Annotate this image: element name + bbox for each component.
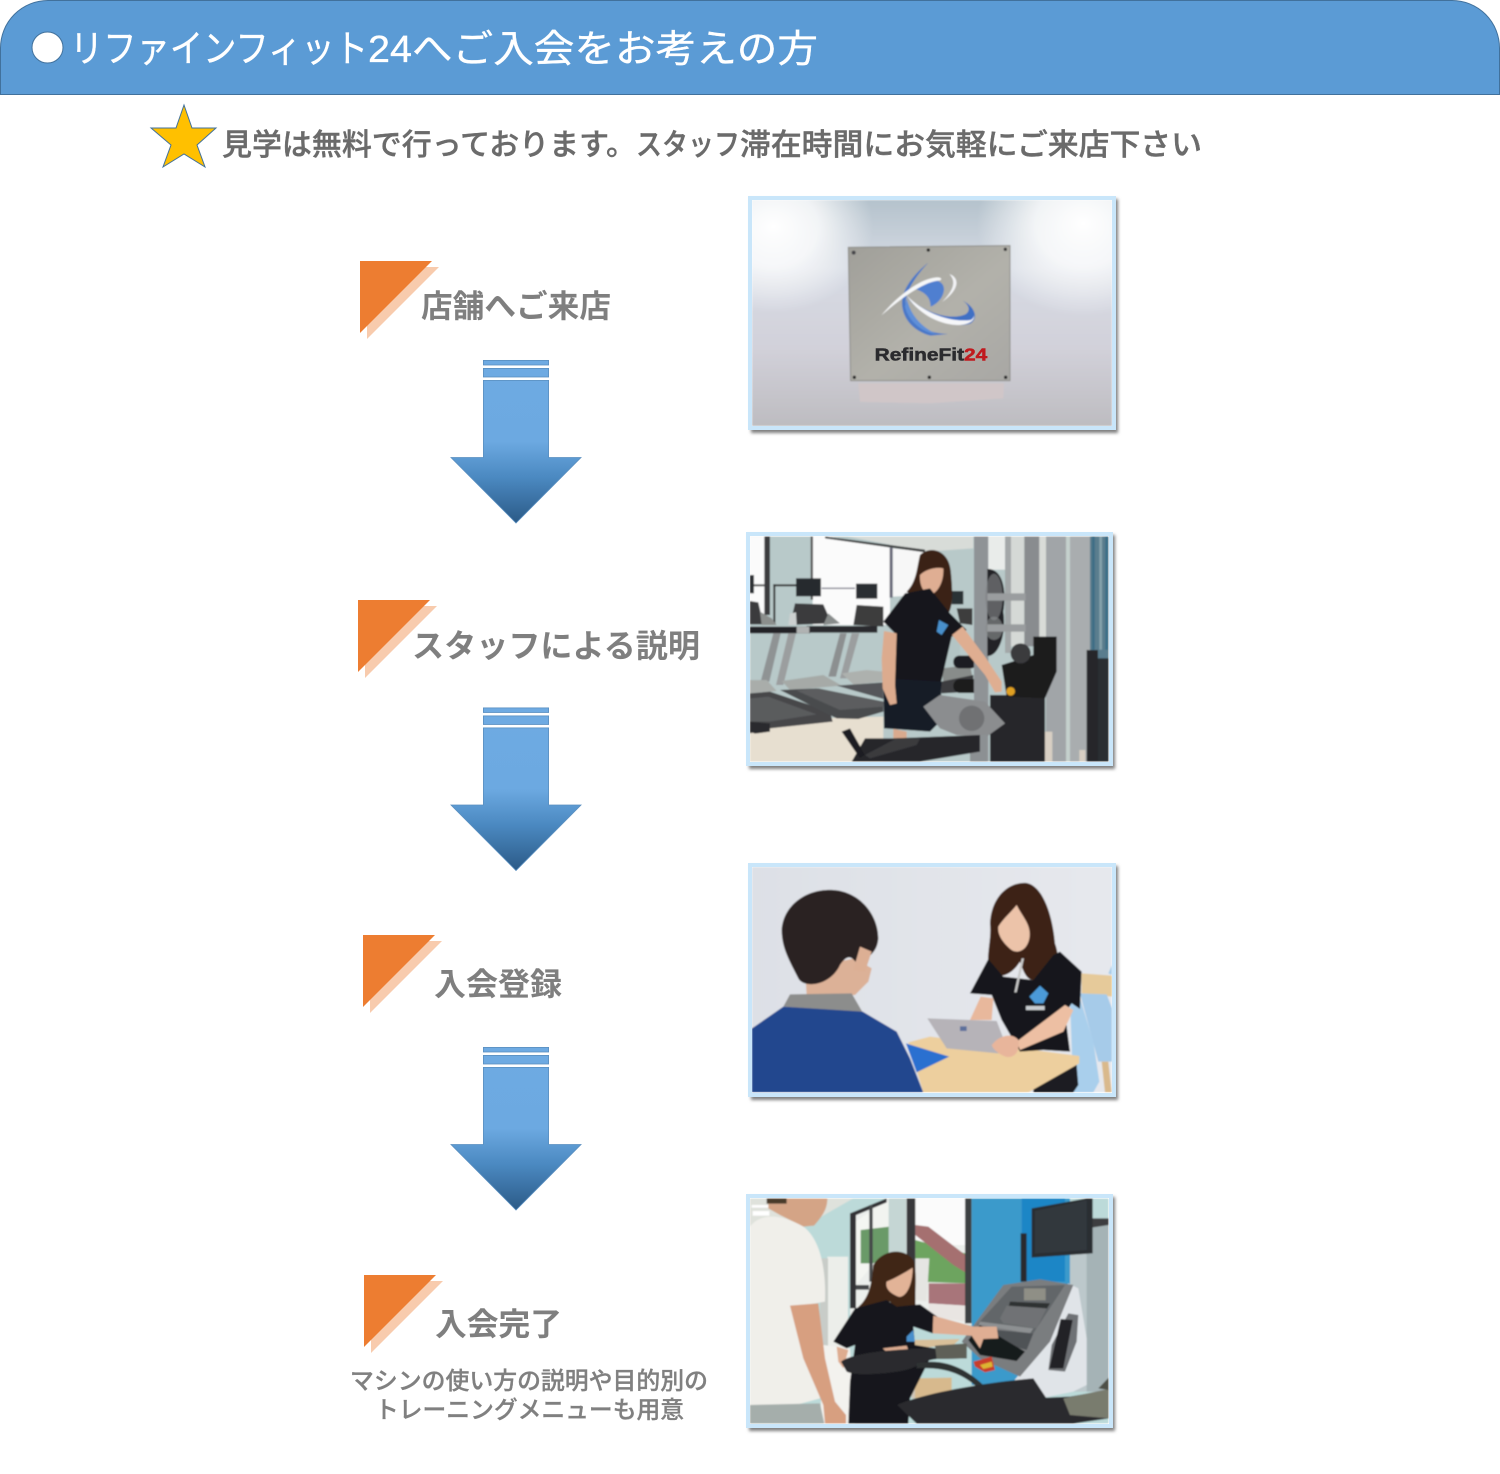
exercise bench xyxy=(923,695,1005,737)
step 1 label: 店舗へご来店 xyxy=(421,288,611,324)
icon: gold star xyxy=(151,105,216,167)
header banner xyxy=(0,0,1500,94)
step 2: staff explanation xyxy=(358,600,700,678)
triangle marker xyxy=(364,1275,443,1353)
title: 24 xyxy=(368,29,412,71)
triangle marker xyxy=(358,600,437,678)
step 2 label: スタッフによる説明 xyxy=(412,628,700,664)
treadmill body xyxy=(1013,1283,1087,1398)
intro text: スタッフ xyxy=(636,129,740,162)
arrow 3 xyxy=(451,1047,581,1210)
woman xyxy=(857,1250,916,1309)
tablet xyxy=(927,1018,1003,1053)
photo 4: treadmill guidance xyxy=(748,1196,1115,1431)
sign wordmark: RefineFit 24 xyxy=(875,345,988,365)
step 3 label: 入会登録 xyxy=(434,966,562,1002)
arrow 2 xyxy=(451,708,581,870)
step 4: registration complete xyxy=(350,1275,708,1424)
step 3: registration xyxy=(363,935,562,1013)
step 4 description: マシンの使い方の説明や目的別の xyxy=(350,1368,708,1395)
title: へご入会をお考えの方 xyxy=(412,29,818,71)
step 4 description xyxy=(350,1368,708,1424)
window xyxy=(850,1198,972,1325)
icon: white circle bullet xyxy=(32,32,63,63)
photo 3: registration at table xyxy=(750,865,1118,1100)
triangle marker xyxy=(360,261,439,339)
step 4 description: トレーニングメニューも用意 xyxy=(375,1397,684,1424)
triangle marker xyxy=(363,935,442,1013)
shelf xyxy=(913,1339,960,1348)
title xyxy=(70,29,818,71)
woman xyxy=(988,883,1058,980)
man xyxy=(805,958,872,995)
title: リファインフィット xyxy=(70,29,368,71)
table and folder xyxy=(908,1037,1079,1092)
arrow 1 xyxy=(451,360,581,523)
handrail and deck xyxy=(841,1344,967,1374)
photo 2: staff explaining machines xyxy=(748,534,1115,769)
intro text: 滞在時間にお気軽にご来店下さい xyxy=(740,129,1202,162)
woman xyxy=(907,550,952,617)
step 4 label: 入会完了 xyxy=(435,1306,562,1342)
intro text xyxy=(222,129,1202,162)
man xyxy=(768,1198,827,1227)
step 1: visit store xyxy=(360,261,611,339)
intro text: 見学は無料で行っております。 xyxy=(222,129,636,162)
photo 1: store sign xyxy=(748,196,1120,436)
